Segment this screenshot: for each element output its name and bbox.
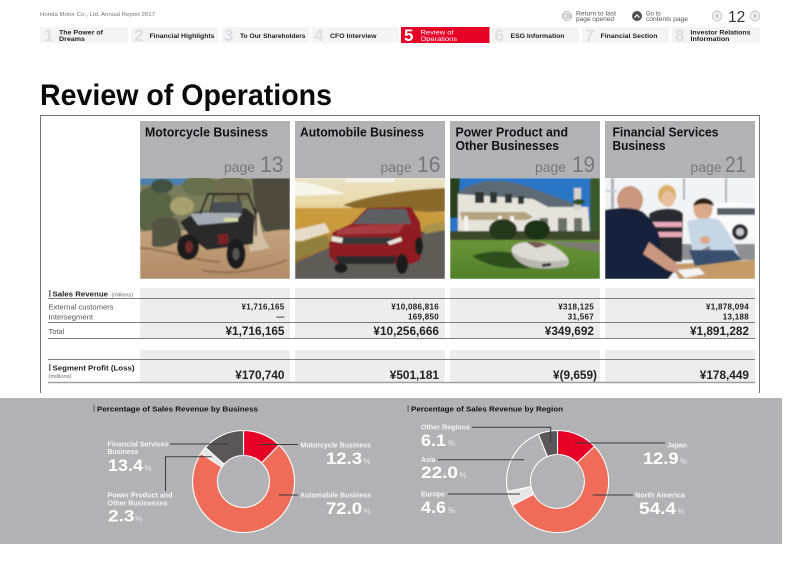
- row heading: sales revenue: [49, 290, 133, 298]
- label: motorcycle share: [300, 440, 371, 468]
- financial services sales values: ¥1,891,282: [690, 324, 749, 338]
- header link: go to contents page: Go to: [646, 12, 661, 18]
- label: financial services share: %: [144, 464, 152, 473]
- motorcycle sales values: [225, 302, 285, 338]
- heading: by region: Percentage of Sales Revenue by Region: [411, 404, 563, 414]
- automobile sales values: [373, 302, 439, 338]
- tab 3: 3: [224, 26, 233, 45]
- label: power product share: [108, 490, 172, 526]
- vehicle: [180, 208, 255, 250]
- row heading: segment profit: [48, 364, 135, 380]
- label: power product share: Other Businesses: [108, 498, 168, 508]
- man right: [694, 198, 712, 220]
- photo: robotic lawn mower: [450, 178, 600, 279]
- panel: automobile business header: 16: [417, 152, 440, 177]
- leader lines: by business: [166, 444, 298, 495]
- panel: financial services header: Business: [612, 139, 666, 153]
- woman: [658, 185, 676, 205]
- photo: off-road vehicle: [134, 176, 290, 279]
- panel: power product header: Other Businesses: [456, 139, 559, 153]
- navigation tabs: [40, 26, 760, 45]
- tab 5 active: 5: [404, 26, 413, 45]
- tab 8: Investor Relations: [690, 30, 751, 36]
- label: motorcycle share: 12.3: [326, 449, 362, 468]
- row heading: segment profit: Segment Profit (Loss): [52, 364, 135, 372]
- tab 4: 4: [314, 26, 324, 45]
- row labels: External customers: [48, 302, 114, 312]
- segment profit values: [235, 368, 749, 382]
- label: europe share: [421, 490, 455, 517]
- panel: motorcycle business header: [140, 121, 290, 178]
- label: other regions share: Other Regions: [421, 422, 470, 432]
- header link: return to last page opened: [562, 11, 616, 23]
- label: power product share: %: [136, 514, 143, 524]
- label: europe share: Europe: [421, 490, 445, 498]
- tab 8: Information: [690, 36, 730, 43]
- tab 3: To Our Shareholders: [240, 33, 306, 40]
- power product sales values: ¥318,125: [558, 302, 594, 312]
- panel: motorcycle business header: page: [224, 159, 255, 175]
- tab 7: Financial Section: [600, 33, 658, 40]
- tab 1: 1: [44, 26, 53, 45]
- label: power product share: Power Product and: [108, 490, 172, 500]
- label: financial services share: 13.4: [108, 456, 144, 475]
- financial services sales values: [690, 302, 749, 338]
- segment profit values: ¥178,449: [700, 368, 749, 382]
- panel: power product header: page: [535, 159, 566, 175]
- donut chart: by region: [507, 430, 609, 533]
- panel: power product header: [450, 121, 600, 178]
- content frame: [40, 116, 760, 393]
- page header: company and report name: Honda Motor Co., Ltd. Annual Report 2017: [40, 12, 155, 18]
- label: asia share: Asia: [421, 455, 436, 464]
- label: motorcycle share: %: [364, 457, 371, 466]
- segment profit values: ¥501,181: [390, 368, 439, 382]
- tab 5 active: Review of: [420, 30, 454, 36]
- man left: [617, 186, 643, 214]
- row labels: [48, 302, 114, 336]
- heading: by business: Percentage of Sales Revenue by Business: [97, 404, 258, 414]
- label: financial services share: Financial Services: [108, 440, 168, 448]
- header link: go to contents page: [632, 11, 689, 23]
- tab 2: 2: [134, 26, 143, 45]
- power product sales values: [545, 302, 594, 338]
- tab 7: 7: [585, 26, 594, 45]
- row heading: sales revenue: (millions): [112, 292, 133, 298]
- panel: motorcycle business header: Motorcycle Business: [145, 126, 268, 140]
- label: north america share: %: [678, 507, 685, 516]
- tab 1: Dreams: [59, 36, 85, 43]
- panel: financial services header: Financial Services: [612, 126, 719, 140]
- label: other regions share: %: [448, 439, 455, 448]
- label: japan share: Japan: [667, 440, 687, 450]
- label: other regions share: [421, 422, 470, 450]
- label: north america share: [635, 490, 686, 518]
- header link: return to last page opened: page opened: [576, 17, 614, 23]
- automobile sales values: 169,850: [408, 312, 439, 322]
- row heading: segment profit: (millions): [48, 374, 72, 380]
- car: [329, 207, 423, 264]
- label: north america share: 54.4: [639, 499, 677, 518]
- panel: financial services header: page: [690, 159, 722, 175]
- panel: power product header: Power Product and: [456, 126, 568, 140]
- label: japan share: 12.9: [643, 449, 678, 468]
- tab 4: [312, 26, 399, 45]
- motorcycle sales values: —: [276, 312, 284, 322]
- photo: red SUV: [295, 178, 445, 279]
- label: asia share: [421, 455, 467, 482]
- label: motorcycle share: Motorcycle Business: [300, 440, 371, 450]
- financial services sales values: ¥1,878,094: [706, 302, 749, 312]
- label: power product share: 2.3: [108, 506, 134, 526]
- table: [671, 260, 755, 279]
- segment profit values: ¥170,740: [235, 368, 285, 382]
- automobile sales values: ¥10,256,666: [373, 324, 439, 338]
- photo: customers at dealership: [605, 178, 755, 279]
- panel: revenue share background: [0, 398, 782, 544]
- tab 6: [492, 26, 579, 45]
- motorcycle sales values: ¥1,716,165: [241, 302, 285, 312]
- header link: go to contents page: contents page: [646, 17, 689, 23]
- power product sales values: ¥349,692: [545, 324, 594, 338]
- tab 6: 6: [494, 26, 504, 45]
- automobile sales values: ¥10,086,816: [391, 302, 439, 312]
- panel: automobile business header: Automobile Business: [300, 126, 424, 140]
- panel: financial services header: 21: [725, 152, 746, 177]
- tab 2: Financial Highlights: [150, 33, 215, 40]
- label: automobile share: [300, 490, 371, 518]
- tab 5 active: [401, 26, 490, 45]
- table: column backgrounds: [140, 288, 755, 382]
- mower: [512, 242, 569, 268]
- row heading: sales revenue: Sales Revenue: [52, 290, 108, 298]
- tab 8: [672, 26, 760, 45]
- panel: power product header: 19: [572, 152, 595, 177]
- donut chart: by business: [193, 430, 295, 533]
- tab 1: [40, 26, 128, 45]
- label: japan share: %: [680, 457, 687, 466]
- label: japan share: [643, 440, 687, 468]
- tab 1: The Power of: [59, 29, 104, 36]
- financial services sales values: 13,188: [723, 312, 749, 322]
- leader lines: by region: [438, 427, 665, 495]
- panel: automobile business header: page: [380, 159, 412, 175]
- label: asia share: 22.0: [421, 463, 458, 482]
- tab 3: [222, 26, 309, 45]
- label: north america share: North America: [635, 490, 686, 500]
- panel: automobile business header: [295, 121, 445, 178]
- tab 6: ESG Information: [510, 33, 564, 40]
- page number with previous and next arrows: 12: [728, 9, 745, 26]
- title: Review of Operations: [40, 79, 332, 112]
- tab 7: [582, 26, 669, 45]
- segment profit values: ¥(9,659): [553, 368, 597, 382]
- row labels: Total: [48, 327, 64, 336]
- label: europe share: 4.6: [421, 498, 446, 517]
- label: financial services share: Business: [108, 447, 138, 456]
- panel: financial services header: [605, 121, 755, 178]
- tab 5 active: Operations: [420, 36, 457, 43]
- row labels: Intersegment: [48, 312, 93, 322]
- motorcycle sales values: ¥1,716,165: [225, 324, 285, 338]
- label: automobile share: 72.0: [326, 499, 362, 518]
- power product sales values: 31,567: [568, 312, 594, 322]
- header link: return to last page opened: Return to last: [576, 12, 616, 18]
- tab 2: [131, 26, 218, 45]
- tab 4: CFO Interview: [330, 33, 377, 40]
- page number with previous and next arrows: [712, 9, 760, 26]
- label: europe share: %: [448, 506, 455, 515]
- label: automobile share: %: [364, 507, 371, 516]
- label: other regions share: 6.1: [421, 431, 446, 450]
- label: asia share: %: [460, 471, 467, 480]
- label: automobile share: Automobile Business: [300, 490, 371, 500]
- label: financial services share: [108, 440, 168, 475]
- panel: motorcycle business header: 13: [260, 152, 284, 177]
- tab 8: 8: [675, 26, 684, 45]
